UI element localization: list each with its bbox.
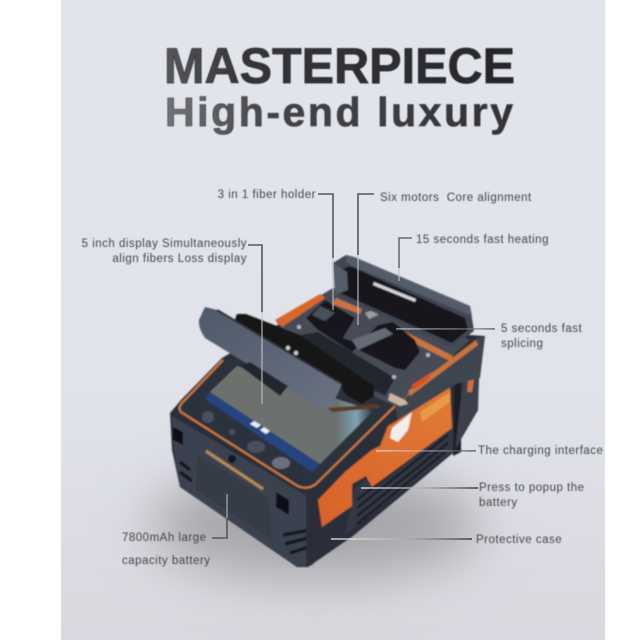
leader line [399, 238, 412, 268]
callout: 7800mAh battery [122, 494, 227, 567]
orange side panel [318, 386, 452, 527]
heading: MASTERPIECE: MASTERPIECE [164, 38, 515, 94]
leader line over device [357, 255, 359, 325]
label: 5 seconds fast [501, 323, 582, 335]
callout: press to popup the battery [361, 482, 585, 509]
side panel lower vents [345, 410, 458, 535]
vent slats [357, 428, 448, 524]
callout: six motors [358, 192, 532, 325]
fiber holder block right [355, 322, 420, 370]
device base silhouette [170, 292, 485, 567]
right rear pillar [455, 372, 478, 450]
label: capacity battery [122, 555, 211, 567]
heater white strip [373, 282, 416, 302]
core alignment clamp [352, 328, 393, 350]
left windproof cover inner [234, 314, 374, 404]
callout: 5 inch display [82, 238, 262, 404]
rear heater lid interior [336, 266, 468, 343]
charging interface cover [390, 412, 412, 442]
orange highlight [420, 392, 450, 422]
callout: 15 seconds fast heating [399, 234, 549, 281]
brown hinge bar [328, 404, 380, 412]
front corner bumpers [173, 427, 289, 515]
side pillar [453, 352, 461, 456]
leader line [212, 518, 227, 538]
orange strip front right [408, 340, 478, 396]
orange rear tab [467, 368, 476, 392]
left windproof cover [199, 307, 342, 408]
interior screws [297, 325, 430, 379]
deck control buttons [202, 411, 290, 469]
battery front face [172, 416, 306, 566]
screen status buttons [250, 421, 270, 434]
device floor shadow [150, 470, 480, 580]
fiber fusion splicer device [170, 255, 485, 567]
label: align fibers Loss display [112, 253, 247, 265]
metal details [365, 308, 412, 319]
leader line [248, 245, 262, 312]
label: 15 seconds fast heating [416, 234, 549, 246]
leader line over device [332, 258, 334, 310]
label: The charging interface [478, 445, 603, 457]
corner pillar [306, 496, 340, 566]
deck orange trim [179, 360, 428, 488]
orange accent [412, 372, 432, 390]
touchscreen [210, 366, 373, 464]
leader line [331, 538, 472, 540]
leader line [361, 487, 478, 489]
bumper ridges [180, 462, 312, 553]
control deck [179, 358, 394, 488]
label: 7800mAh large [122, 532, 206, 544]
label: Press to popup the [479, 482, 585, 494]
battery compartment [196, 455, 272, 540]
rear heater lid outer [333, 255, 474, 347]
callout: 3 in 1 fiber holder [218, 189, 333, 310]
top rim right [395, 336, 485, 420]
cover shadow latch on screen [240, 362, 288, 396]
heading: High-end luxury: High-end luxury [165, 89, 513, 135]
leader line [318, 194, 333, 258]
label: Protective case [476, 534, 562, 546]
label: 5 inch display Simultaneously [82, 238, 247, 250]
orange strip rear left [275, 294, 325, 327]
fiber holder top [312, 306, 335, 321]
leader line [376, 450, 476, 452]
leader line [396, 328, 495, 330]
cover rim highlight [217, 310, 342, 384]
battery indicator strip [206, 451, 263, 489]
cover clips [286, 346, 298, 355]
leader line [358, 194, 374, 255]
leader line over device [226, 494, 228, 518]
label: Six motors Core alignment [380, 192, 532, 204]
orange strip right [392, 326, 453, 361]
label: 3 in 1 fiber holder [218, 189, 316, 201]
interior splicing bay [276, 288, 470, 406]
dark bay channel [300, 332, 395, 396]
orange strip rear centre [332, 298, 362, 314]
lid top band [346, 255, 472, 316]
label: splicing [501, 338, 543, 350]
screen blue strip [205, 392, 320, 472]
power port [228, 455, 236, 463]
windshield hinge [388, 393, 408, 406]
leader line over device [398, 268, 400, 281]
title [164, 38, 515, 135]
callout: 5 seconds fast splicing [396, 323, 582, 350]
leader line over device [261, 312, 263, 404]
fiber holder block left [306, 300, 360, 352]
lid side wall [333, 263, 348, 295]
label: battery [479, 497, 518, 509]
